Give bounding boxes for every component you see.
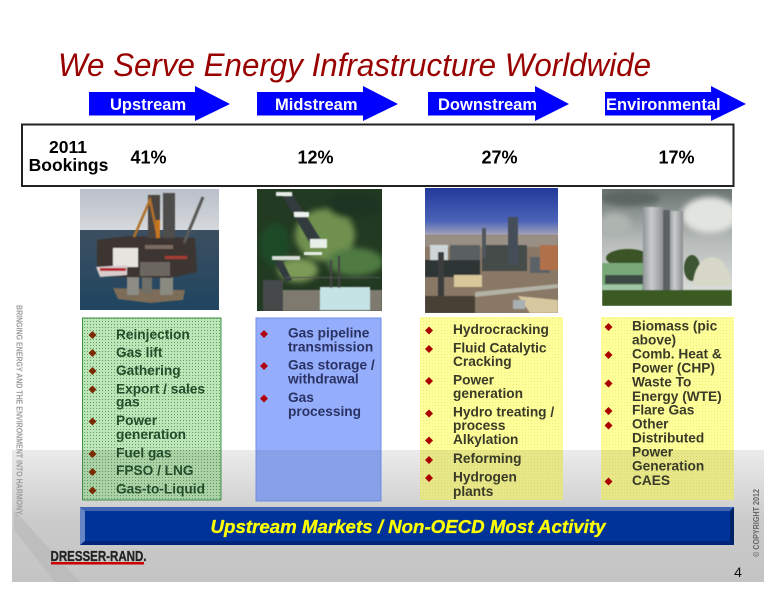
midstream list: Gas storage /: [288, 358, 375, 372]
upstream list: [116, 327, 205, 496]
downstream list: Hydrogen: [453, 470, 517, 484]
value: upstream share: 41%: [130, 148, 167, 168]
photo: refinery: [425, 188, 558, 313]
environmental list: above): [632, 332, 676, 348]
midstream list: processing: [288, 404, 361, 419]
downstream list: Alkylation: [453, 432, 518, 447]
logo: Dresser-Rand: DRESSER-RAND.: [50, 548, 146, 565]
label: 2011 Bookings: Bookings: [29, 155, 109, 175]
copyright note: © COPYRIGHT 2012: [752, 489, 761, 557]
banner: upstream markets: [80, 507, 734, 545]
downstream list: Reforming: [453, 451, 521, 466]
label: 2011 Bookings: [29, 137, 109, 175]
title: We Serve Energy Infrastructure Worldwide: [58, 47, 651, 83]
environmental list: Waste To: [632, 374, 691, 390]
arrow: Midstream: Midstream: [275, 96, 358, 114]
downstream list: Hydrocracking: [453, 322, 549, 337]
vertical tagline: BRINGING ENERGY AND THE ENVIRONMENT INTO HARMONY.: [14, 305, 24, 516]
midstream list: transmission: [288, 340, 373, 354]
upstream list: gas: [116, 394, 140, 410]
downstream list: process: [453, 418, 506, 433]
upstream list: Gas lift: [116, 345, 163, 360]
upstream list: Power: [116, 413, 158, 428]
arrow: Environmental: Environmental: [606, 96, 721, 114]
midstream list: withdrawal: [287, 372, 359, 386]
downstream list: Fluid Catalytic: [453, 340, 547, 356]
midstream list: Gas: [288, 390, 314, 405]
banner: upstream markets: Upstream Markets / Non-OECD Most Activity: [211, 516, 607, 537]
downstream list: Power: [453, 372, 495, 388]
upstream list: Export / sales: [116, 382, 205, 396]
photo: offshore oil platform: [80, 189, 219, 310]
panel: 2011 bookings: [22, 124, 734, 186]
value: downstream share: 27%: [481, 148, 518, 168]
upstream list: Fuel gas: [116, 446, 172, 460]
panel: midstream applications: [256, 318, 381, 501]
bullets: [425, 326, 433, 482]
environmental list: Generation: [632, 458, 704, 474]
environmental list: Distributed: [632, 430, 704, 446]
photo: biomass silos: [599, 189, 738, 306]
bullets: [88, 331, 96, 494]
arrow: Upstream: Upstream: [110, 96, 186, 114]
arrow: Downstream: Downstream: [438, 96, 537, 114]
environmental list: CAES: [632, 473, 670, 488]
downstream list: [453, 322, 554, 499]
environmental list: Power: [632, 444, 674, 460]
downstream list: generation: [453, 386, 523, 401]
midstream list: Gas pipeline: [288, 326, 370, 340]
panel: upstream applications: [82, 318, 221, 500]
environmental list: [632, 318, 722, 488]
environmental list: Comb. Heat &: [632, 346, 722, 362]
value: environmental share: 17%: [658, 148, 695, 168]
upstream list: generation: [116, 427, 186, 442]
bullets: [260, 330, 268, 402]
environmental list: Power (CHP): [632, 360, 715, 376]
downstream list: Cracking: [453, 354, 512, 369]
panel: environmental applications: [601, 317, 734, 500]
environmental list: Biomass (pic: [632, 318, 718, 334]
footer background band: [12, 450, 764, 582]
environmental list: Flare Gas: [632, 402, 695, 418]
arrow: Downstream: [428, 86, 569, 121]
downstream list: Hydro treating /: [453, 404, 554, 420]
arrow: Upstream: [89, 86, 230, 121]
arrow: Environmental: [605, 86, 746, 121]
upstream list: Reinjection: [116, 327, 190, 342]
environmental list: Energy (WTE): [632, 389, 722, 404]
photo: pipeline on hillside: [257, 189, 383, 311]
upstream list: Gas-to-Liquid: [116, 482, 205, 496]
page number: 4: [734, 564, 742, 580]
midstream list: [287, 326, 375, 419]
panel: downstream applications: [420, 317, 563, 500]
value: midstream share: 12%: [297, 148, 334, 168]
label: 2011 Bookings: 2011: [49, 137, 87, 157]
environmental list: Other: [632, 416, 669, 432]
arrow: Midstream: [257, 86, 398, 121]
upstream list: Gathering: [116, 363, 181, 378]
bullets: [604, 323, 612, 486]
upstream list: FPSO / LNG: [116, 463, 194, 478]
downstream list: plants: [453, 484, 494, 499]
